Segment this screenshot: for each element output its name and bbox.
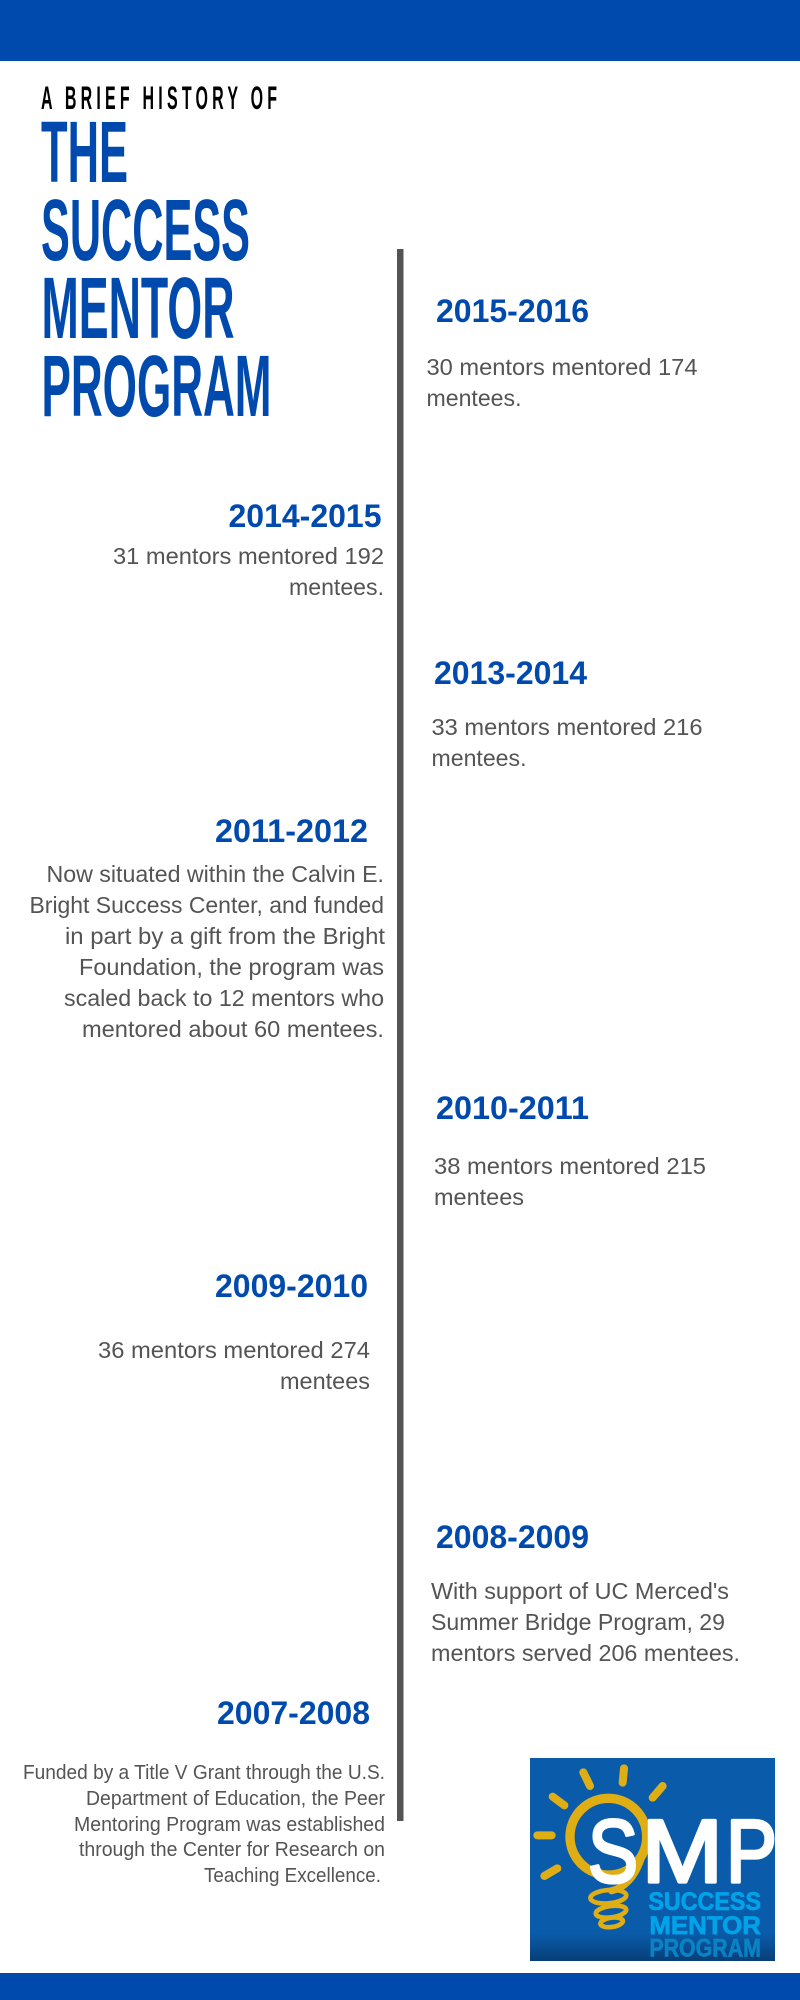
- entry: 2014-2015: [113, 498, 384, 600]
- description: [98, 1337, 370, 1394]
- description: [434, 1153, 706, 1210]
- description: 30 mentors mentored 174: [426, 354, 698, 380]
- logo background: [530, 1758, 775, 1961]
- description: mentees.: [289, 574, 384, 600]
- description: Funded by a Title V Grant through the U.S.: [23, 1762, 385, 1784]
- description: 33 mentors mentored 216: [432, 714, 702, 740]
- logo wordmark: MENTOR: [649, 1912, 761, 1940]
- year heading: 2007-2008: [217, 1695, 370, 1731]
- description: mentors served 206 mentees.: [431, 1640, 740, 1666]
- description: Teaching Excellence.: [204, 1865, 381, 1887]
- description: 38 mentors mentored 215: [434, 1153, 706, 1179]
- description: mentees.: [432, 745, 526, 771]
- description: [426, 354, 698, 411]
- logo letters SMP: M: [642, 1801, 723, 1901]
- logo letters SMP: P: [726, 1801, 777, 1901]
- main title: [41, 104, 272, 435]
- description: 36 mentors mentored 274: [98, 1337, 370, 1363]
- logo wordmark: PROGRAM: [649, 1935, 761, 1963]
- main title: PROGRAM: [42, 338, 272, 435]
- description: mentees.: [426, 385, 522, 411]
- top banner bar: [0, 0, 800, 61]
- description: Now situated within the Calvin E.: [46, 861, 384, 887]
- description: [30, 861, 385, 1042]
- description: With support of UC Merced's: [431, 1578, 729, 1604]
- main title: THE: [41, 104, 128, 201]
- logo letters SMP: [588, 1801, 777, 1901]
- description: mentees: [280, 1368, 370, 1394]
- main title: MENTOR: [42, 260, 234, 357]
- description: 31 mentors mentored 192: [113, 543, 384, 569]
- logo wordmark: [648, 1888, 761, 1963]
- description: Summer Bridge Program, 29: [431, 1609, 725, 1635]
- icon: light bulb: [537, 1768, 663, 1929]
- year heading: 2014-2015: [228, 498, 382, 534]
- subtitle: A BRIEF HISTORY OF: [41, 81, 277, 117]
- entry: 2010-2011: [434, 1090, 706, 1210]
- description: Foundation, the program was: [79, 954, 384, 980]
- timeline vertical line: [397, 249, 404, 1821]
- year heading: 2008-2009: [436, 1519, 589, 1555]
- logo: SMP Success Mentor Program: [530, 1758, 777, 1963]
- description: Mentoring Program was established: [74, 1814, 385, 1836]
- description: scaled back to 12 mentors who: [64, 985, 384, 1011]
- description: in part by a gift from the Bright: [65, 923, 385, 949]
- year heading: 2013-2014: [434, 655, 587, 691]
- year heading: 2010-2011: [436, 1090, 589, 1126]
- year heading: 2009-2010: [215, 1268, 368, 1304]
- description: [432, 714, 702, 771]
- logo wordmark: SUCCESS: [648, 1888, 761, 1916]
- year heading: 2015-2016: [436, 293, 589, 329]
- description: mentored about 60 mentees.: [82, 1016, 384, 1042]
- description: [431, 1578, 740, 1666]
- entry: 2009-2010: [98, 1268, 370, 1394]
- entry: 2007-2008: [23, 1695, 385, 1887]
- description: Department of Education, the Peer: [86, 1788, 385, 1810]
- description: mentees: [434, 1184, 524, 1210]
- main title: SUCCESS: [41, 182, 250, 279]
- description: [113, 543, 384, 600]
- entry: 2015-2016: [426, 293, 698, 411]
- title block: [41, 81, 277, 435]
- entry: 2011-2012: [30, 813, 385, 1042]
- description: Bright Success Center, and funded: [30, 892, 384, 918]
- description: through the Center for Research on: [79, 1839, 385, 1861]
- entry: 2013-2014: [432, 655, 702, 771]
- year heading: 2011-2012: [215, 813, 368, 849]
- bottom banner bar: [0, 1973, 800, 2000]
- description: [23, 1762, 385, 1887]
- logo letters SMP: S: [588, 1801, 638, 1901]
- entry: 2008-2009: [431, 1519, 740, 1666]
